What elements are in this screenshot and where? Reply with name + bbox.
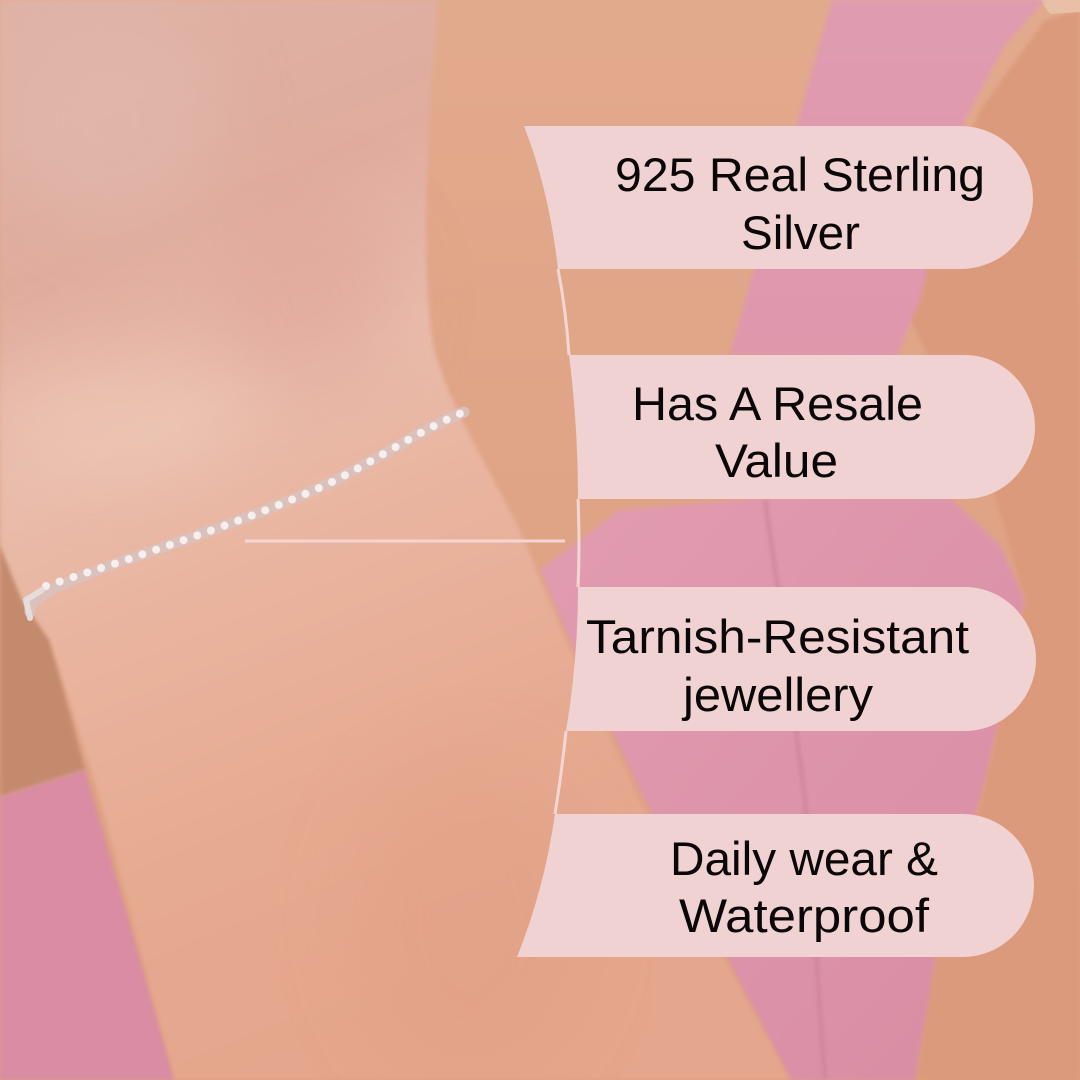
- bracelet: [26, 412, 464, 618]
- connector curve: [555, 269, 579, 814]
- pointer line from bracelet: [245, 540, 565, 542]
- photo: background skin lower left: [0, 540, 85, 797]
- panel: resale value: [569, 355, 1035, 499]
- panel: 925 real sterling silver: 925 Real Sterling: [615, 148, 985, 201]
- panel: tarnish-resistant jewellery: Tarnish-Resistant: [586, 610, 969, 663]
- photo: pink fabric lower left: [0, 770, 175, 1080]
- photo: skin tone shading: [0, 10, 590, 1080]
- panel: resale value: Has A Resale: [632, 377, 923, 430]
- panel: daily wear and waterproof: [517, 814, 1034, 957]
- panel: tarnish-resistant jewellery: jewellery: [681, 668, 874, 721]
- panel: resale value: Value: [715, 434, 838, 487]
- panel: 925 real sterling silver: Silver: [741, 206, 860, 259]
- photo: wrist and forearm: [0, 0, 790, 1080]
- panel: 925 real sterling silver: [524, 126, 1033, 269]
- panel: tarnish-resistant jewellery: [566, 587, 1036, 731]
- panel: daily wear and waterproof: Waterproof: [679, 889, 930, 942]
- photo: pink dress strap: [730, 0, 1045, 360]
- panel: daily wear and waterproof: Daily wear &: [670, 832, 938, 885]
- photo: pink dress: [540, 498, 1025, 1080]
